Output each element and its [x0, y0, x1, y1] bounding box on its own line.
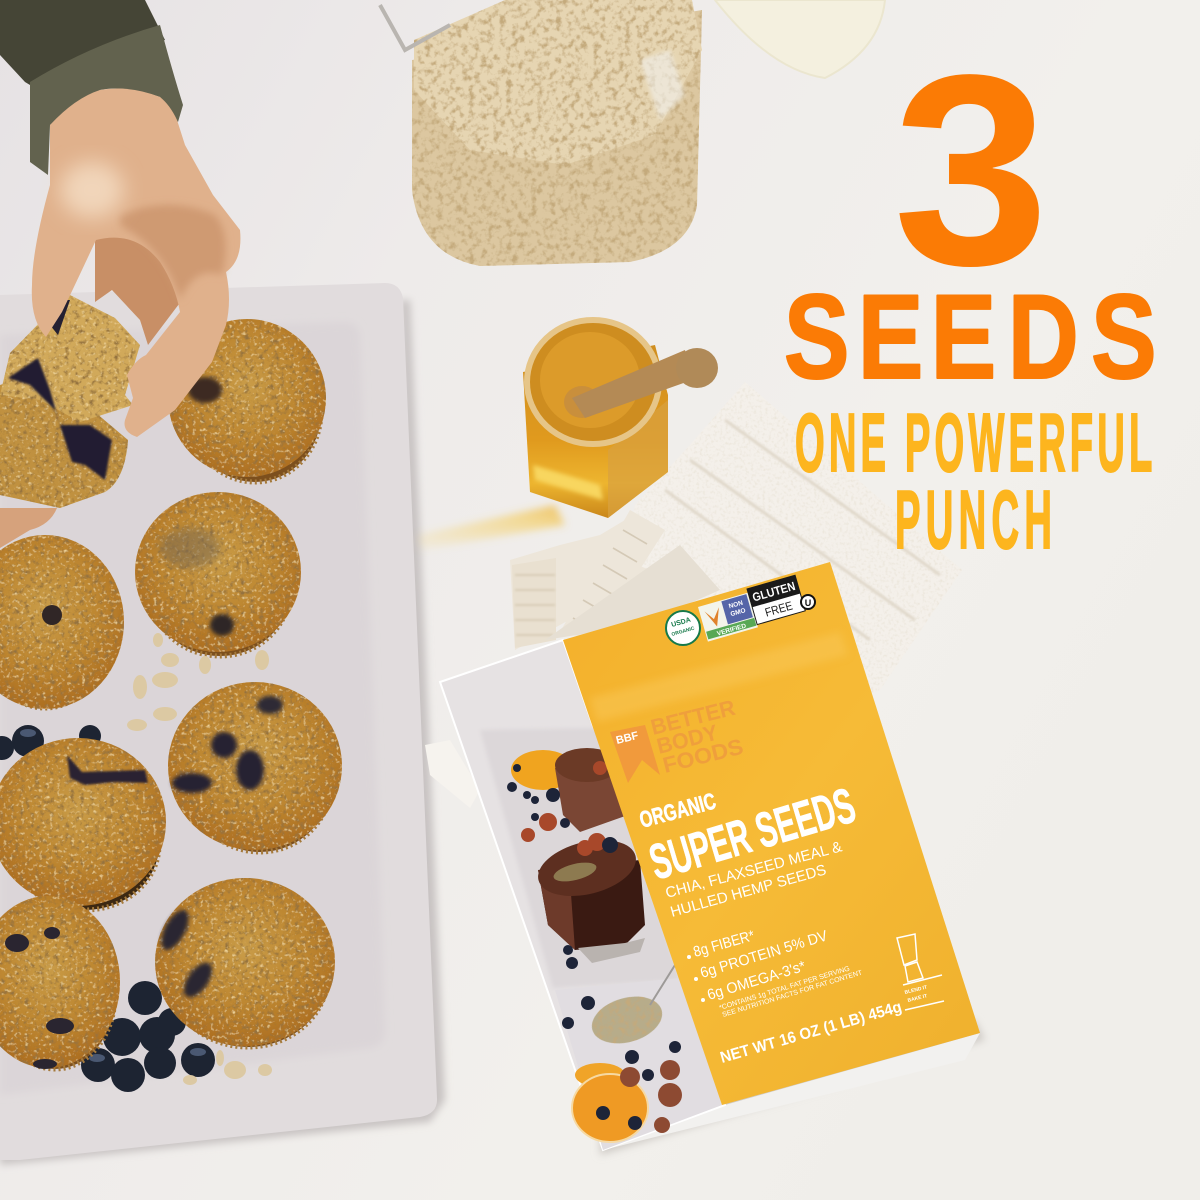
topping seeds	[552, 859, 598, 885]
BBF logo ribbon: BBF	[615, 730, 640, 747]
non-GMO badge	[698, 593, 758, 642]
white back panel	[440, 640, 980, 1150]
seeds pile	[586, 989, 668, 1051]
spoon	[650, 965, 675, 1005]
glass reflection	[640, 50, 685, 120]
nutrition bullets	[687, 927, 830, 1004]
muffin right middle	[168, 682, 342, 852]
oats jar	[380, 0, 885, 266]
nutrition bullets: 8g FIBER*	[691, 927, 757, 961]
lifestyle photos on panel	[480, 728, 722, 1150]
kosher mark	[801, 595, 815, 609]
footnote: *CONTAINS 1g TOTAL FAT PER SERVING	[719, 965, 851, 1012]
blender caption	[904, 985, 928, 1004]
fringe one threads	[515, 575, 555, 635]
oats upper layer	[414, 0, 702, 165]
fringe two	[560, 510, 665, 640]
orange slice back	[575, 1063, 625, 1087]
subheading: punch: PUNCH	[895, 473, 1057, 566]
jar right face shading	[608, 400, 668, 518]
main cloth	[625, 382, 962, 700]
BBF logo ribbon	[610, 725, 660, 783]
topping berries	[521, 761, 607, 856]
brand name	[648, 695, 746, 778]
pouch shadow	[600, 1020, 985, 1155]
dipper head	[676, 348, 718, 388]
lower photo	[555, 978, 722, 1150]
fringe two threads	[573, 530, 647, 632]
honey inside	[540, 332, 640, 428]
smoothie glass one	[555, 754, 628, 832]
muffin bottom left	[0, 896, 120, 1069]
orange slice	[511, 750, 575, 790]
palm shading	[120, 205, 226, 300]
nutrition bullets: 6g OMEGA-3's*	[705, 958, 808, 1004]
brand name: BETTER	[648, 695, 738, 740]
cloth woven lines	[665, 420, 940, 640]
non-GMO badge: NON	[728, 600, 744, 610]
honey jar with dipper	[418, 320, 718, 550]
fruit on orange	[596, 1106, 642, 1130]
muffin second	[135, 492, 301, 656]
palm highlight	[60, 162, 124, 218]
plate well	[0, 322, 385, 1095]
dipper	[572, 350, 692, 418]
gluten free badge	[747, 575, 805, 625]
white plate	[0, 283, 437, 1160]
sleeve back	[0, 0, 165, 85]
glass left tint	[538, 870, 575, 950]
fringe one	[512, 558, 556, 648]
glass lid	[715, 0, 885, 78]
folded cloth	[545, 545, 720, 640]
honey swirl	[564, 386, 600, 418]
zipper highlight	[590, 632, 848, 722]
oat flakes on plate	[127, 633, 272, 1085]
sunlight glare	[418, 505, 565, 550]
pouch subtitle: HULLED HEMP SEEDS	[669, 861, 828, 921]
hand holding a muffin	[0, 0, 240, 548]
muffin left middle	[0, 535, 124, 709]
yellow front panel	[563, 562, 980, 1105]
non-GMO badge: VERIFIED	[716, 623, 747, 638]
linen napkin	[425, 382, 962, 808]
smoothie rim two	[532, 831, 642, 905]
net weight: NET WT 16 OZ (1 LB) 454g	[718, 999, 904, 1067]
raspberries	[620, 1060, 682, 1133]
upper photo	[480, 728, 680, 988]
back fingers	[95, 235, 182, 345]
blender caption: BLEND IT	[904, 985, 928, 996]
blueberries	[0, 725, 215, 1092]
brand name: BODY	[654, 720, 721, 759]
smoothie rim one	[555, 748, 619, 782]
USDA badge: USDA	[671, 617, 692, 629]
USDA badge	[666, 611, 700, 645]
thumb below muffin	[0, 508, 57, 548]
pouch title: SUPER SEEDS	[643, 777, 861, 891]
gluten free badge: FREE	[763, 598, 794, 620]
held muffin	[0, 295, 140, 508]
kosher mark: U	[805, 598, 811, 608]
gluten free badge: GLUTEN	[751, 579, 797, 605]
glass foot	[578, 938, 645, 963]
nutrition bullets: 6g PROTEIN 5% DV	[698, 927, 830, 982]
jar body	[523, 345, 668, 518]
headline: SEEDS: SEEDS	[784, 271, 1157, 404]
small fringe left of pouch	[425, 740, 480, 808]
bright band	[533, 465, 603, 500]
sleeve cuff	[30, 25, 183, 175]
plate with muffins	[0, 283, 445, 1165]
headline: 3: 3	[893, 18, 1049, 322]
glass and oats	[412, 10, 702, 266]
footnote: SEE NUTRITION FACTS FOR FAT CONTENT	[722, 969, 864, 1019]
left napkin flap	[510, 520, 650, 650]
non-GMO badge: GMO	[730, 607, 747, 618]
product pouch	[440, 562, 985, 1155]
jar mouth	[527, 320, 659, 444]
smoothie glass two	[538, 860, 645, 950]
muffin top right	[168, 319, 326, 482]
pouch title: ORGANIC	[637, 788, 719, 833]
blender icon	[897, 934, 944, 1010]
orange slice two	[572, 1074, 648, 1142]
muffin bottom right	[155, 878, 335, 1047]
pouch subtitle: CHIA, FLAXSEED MEAL &	[664, 838, 844, 902]
USDA badge: ORGANIC	[671, 626, 696, 638]
hand palm and fingers	[32, 89, 240, 437]
blender caption: BAKE IT	[907, 993, 928, 1004]
subheading: one powerful: ONE POWERFUL	[795, 396, 1156, 489]
muffin left lower	[0, 738, 166, 910]
pouch title	[637, 777, 861, 891]
berries	[507, 764, 681, 1081]
plate shadow	[0, 300, 445, 1165]
brand name: FOODS	[660, 734, 746, 778]
jar clasp	[380, 5, 450, 50]
